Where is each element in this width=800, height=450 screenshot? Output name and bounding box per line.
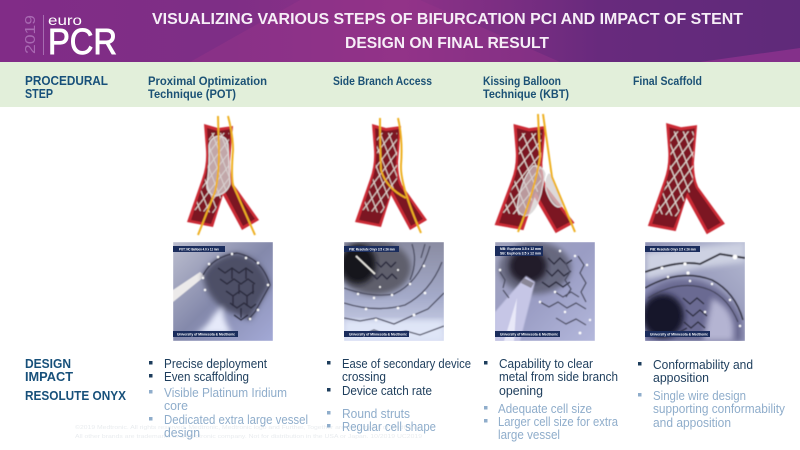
column text: KBT impact: Capability to clear: [499, 357, 593, 371]
title: VISUALIZING VARIOUS STEPS OF BIFURCATION PCI AND IMPACT OF STENT: [152, 11, 743, 28]
column text: POT impact: core: [164, 399, 188, 413]
header banner: [0, 0, 800, 62]
photo labels: PIB: Resolute Onyx 3.5 x 26 mm: [650, 248, 696, 252]
logo: EuroPCR 2019: 2019: [22, 15, 39, 54]
column text: final scaffold impact: apposition: [653, 371, 709, 385]
photo labels: SB: Euphora 3.5 x 12 mm: [500, 252, 541, 256]
column text: side branch impact: Round struts: [342, 407, 410, 421]
column text: POT impact: Precise deployment: [164, 357, 267, 371]
column text: POT impact: Dedicated extra large vessel: [164, 413, 308, 427]
column text: final scaffold impact: Conformability and: [653, 358, 753, 372]
photo labels: [344, 246, 409, 337]
title: [152, 11, 743, 52]
column text: final scaffold impact: supporting conformability: [653, 402, 786, 416]
column text: side branch impact: crossing: [342, 370, 386, 384]
column text: side branch impact: Device catch rate: [342, 384, 432, 398]
diagram: kissing balloon vessel: [495, 114, 575, 233]
column text: POT impact: design: [164, 426, 200, 440]
footer legal text: [75, 424, 423, 440]
column text: side branch impact: Ease of secondary device: [342, 357, 471, 371]
footer legal text: ©2019 Medtronic. All rights reserved. Medtronic, Medtronic logo and Further, Together are trademarks of Medtronic.: [75, 424, 423, 431]
photo labels: University of Minnesota & Medtronic: [650, 332, 708, 336]
column text: POT impact: Even scaffolding: [164, 370, 249, 384]
step: KBT: Technique (KBT): [483, 87, 569, 101]
photo labels: PIB: Resolute Onyx 3.5 x 26 mm: [349, 248, 395, 252]
photo: final scaffold OCT view: [642, 242, 745, 341]
photo labels: University of Minnesota & Medtronic: [349, 332, 407, 336]
photo labels: University of Minnesota & Medtronic: [177, 332, 235, 336]
column text: side branch impact: Regular cell shape: [342, 420, 436, 434]
diagram: side branch access vessel: [355, 118, 427, 233]
column text: POT impact: [149, 357, 308, 440]
logo: EuroPCR 2019: euro: [48, 12, 82, 28]
column text: KBT impact: opening: [499, 384, 543, 398]
column text: final scaffold impact: Single wire design: [653, 389, 746, 403]
logo: EuroPCR 2019: [22, 12, 117, 62]
photo labels: [645, 246, 710, 337]
step: POT: Proximal Optimization: [148, 74, 267, 88]
step: KBT: [483, 74, 569, 101]
photo labels: University of Minnesota & Medtronic: [500, 332, 558, 336]
column text: KBT impact: Adequate cell size: [498, 402, 592, 416]
photo: side branch OCT view: [339, 241, 444, 341]
logo: EuroPCR 2019: PCR: [48, 21, 117, 62]
row label: procedural step: PROCEDURAL: [25, 73, 108, 88]
title: DESIGN ON FINAL RESULT: [345, 35, 549, 52]
column text: KBT impact: [484, 357, 618, 442]
diagram: final scaffold vessel: [648, 123, 725, 234]
photo labels: [495, 246, 560, 337]
step: final scaffold: Final Scaffold: [633, 74, 702, 88]
column text: KBT impact: metal from side branch: [499, 370, 618, 384]
column text: final scaffold impact: [638, 358, 786, 430]
row label: design impact: IMPACT: [25, 369, 73, 384]
column text: KBT impact: Larger cell size for extra: [498, 415, 618, 429]
column text: KBT impact: large vessel: [498, 428, 560, 442]
step: POT: Technique (POT): [148, 87, 236, 101]
column text: POT impact: Visible Platinum Iridium: [164, 386, 287, 400]
step: side branch access: Side Branch Access: [333, 74, 432, 88]
row label: procedural step: STEP: [25, 86, 53, 101]
step: POT: [148, 74, 267, 101]
photo labels: MB: Euphora 3.5 x 12 mm: [500, 247, 541, 251]
row label: procedural step: [25, 73, 108, 101]
diagram: POT vessel: [187, 116, 259, 235]
column text: final scaffold impact: and apposition: [653, 416, 731, 430]
row label: design impact: RESOLUTE ONYX: [25, 388, 126, 403]
row label: design impact: [25, 356, 126, 403]
photo: kissing balloon OCT view: [495, 242, 595, 341]
column text: side branch impact: [327, 357, 471, 434]
photo labels: POT: NC Balloon 4.0 x 12 mm: [179, 248, 219, 252]
step: KBT: Kissing Balloon: [483, 74, 561, 88]
procedural step band: [0, 62, 800, 107]
footer legal text: All other brands are trademarks of a Medtronic company. Not for distribution in the USA or Japan. 10/2019 UC2019: [75, 434, 422, 440]
row label: design impact: DESIGN: [25, 356, 71, 371]
photo: POT OCT view: [173, 242, 273, 341]
photo labels: [173, 246, 238, 337]
